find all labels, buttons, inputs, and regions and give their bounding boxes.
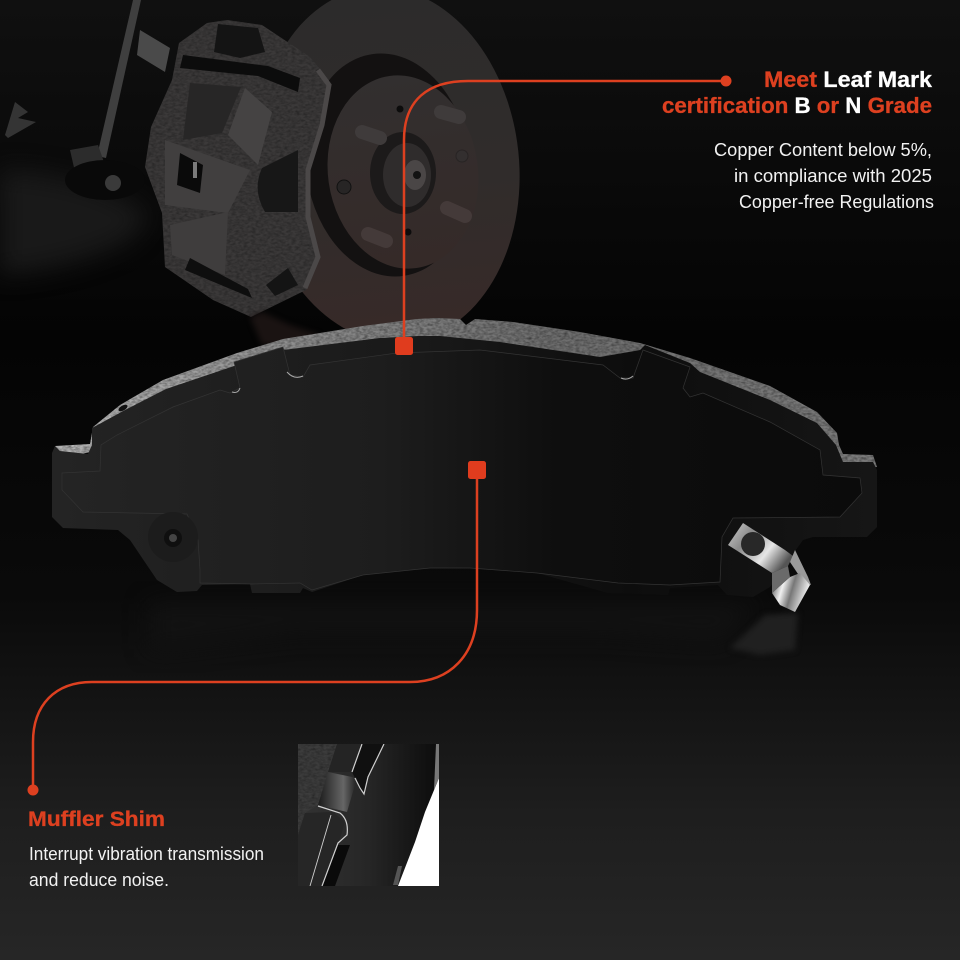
background highlights <box>5 102 36 138</box>
heading: certification: Meet Leaf Mark <box>764 67 926 92</box>
upper dark band <box>328 746 336 772</box>
dark road surface <box>0 170 150 275</box>
caliper shadows <box>165 24 300 298</box>
wheel studs <box>362 112 465 241</box>
background block <box>70 145 105 172</box>
text: muffler shim description: and reduce noise. <box>29 870 169 890</box>
caliper window clip <box>193 162 197 178</box>
small notch <box>393 866 402 885</box>
text: copper content: in compliance with 2025 <box>734 166 932 186</box>
heading: muffler shim: Muffler Shim <box>28 808 165 831</box>
rotor screw holes <box>337 106 468 236</box>
hub centre <box>370 132 436 214</box>
hub recess crescent <box>291 43 485 287</box>
friction material <box>55 318 877 470</box>
shim callout line <box>28 461 486 796</box>
rivet <box>148 512 198 562</box>
brake assembly photo <box>0 0 537 356</box>
rotor disc <box>239 0 537 356</box>
shim tab <box>318 772 357 812</box>
suspension arm <box>97 0 141 158</box>
white background corner <box>398 778 439 886</box>
friction pin hole <box>117 403 129 413</box>
reflection of pad <box>150 604 798 655</box>
hub face <box>315 66 491 278</box>
textured friction <box>298 744 337 835</box>
backing plate <box>52 336 877 597</box>
caliper window <box>177 153 203 193</box>
metal wear clip <box>728 523 811 612</box>
ball joint <box>65 160 145 200</box>
caliper mount block <box>137 30 170 72</box>
caliper body <box>145 20 329 317</box>
lower dark band <box>298 812 324 886</box>
muffler shim <box>62 347 862 590</box>
strip <box>352 744 385 792</box>
edge highlights <box>310 744 384 886</box>
rotor lower shadow <box>250 312 320 345</box>
text: copper content: Copper Content below 5%, <box>714 140 932 160</box>
notch highlights <box>232 372 633 392</box>
text: copper content: Copper-free Regulations <box>739 192 934 212</box>
brake pad <box>52 318 877 612</box>
inset photo: shim close-up <box>298 744 439 886</box>
heading: certification: certification B or N Grade <box>662 93 931 118</box>
text: muffler shim description: Interrupt vibration transmission <box>29 844 264 864</box>
top callout line <box>395 76 732 355</box>
caliper rim <box>305 70 329 288</box>
